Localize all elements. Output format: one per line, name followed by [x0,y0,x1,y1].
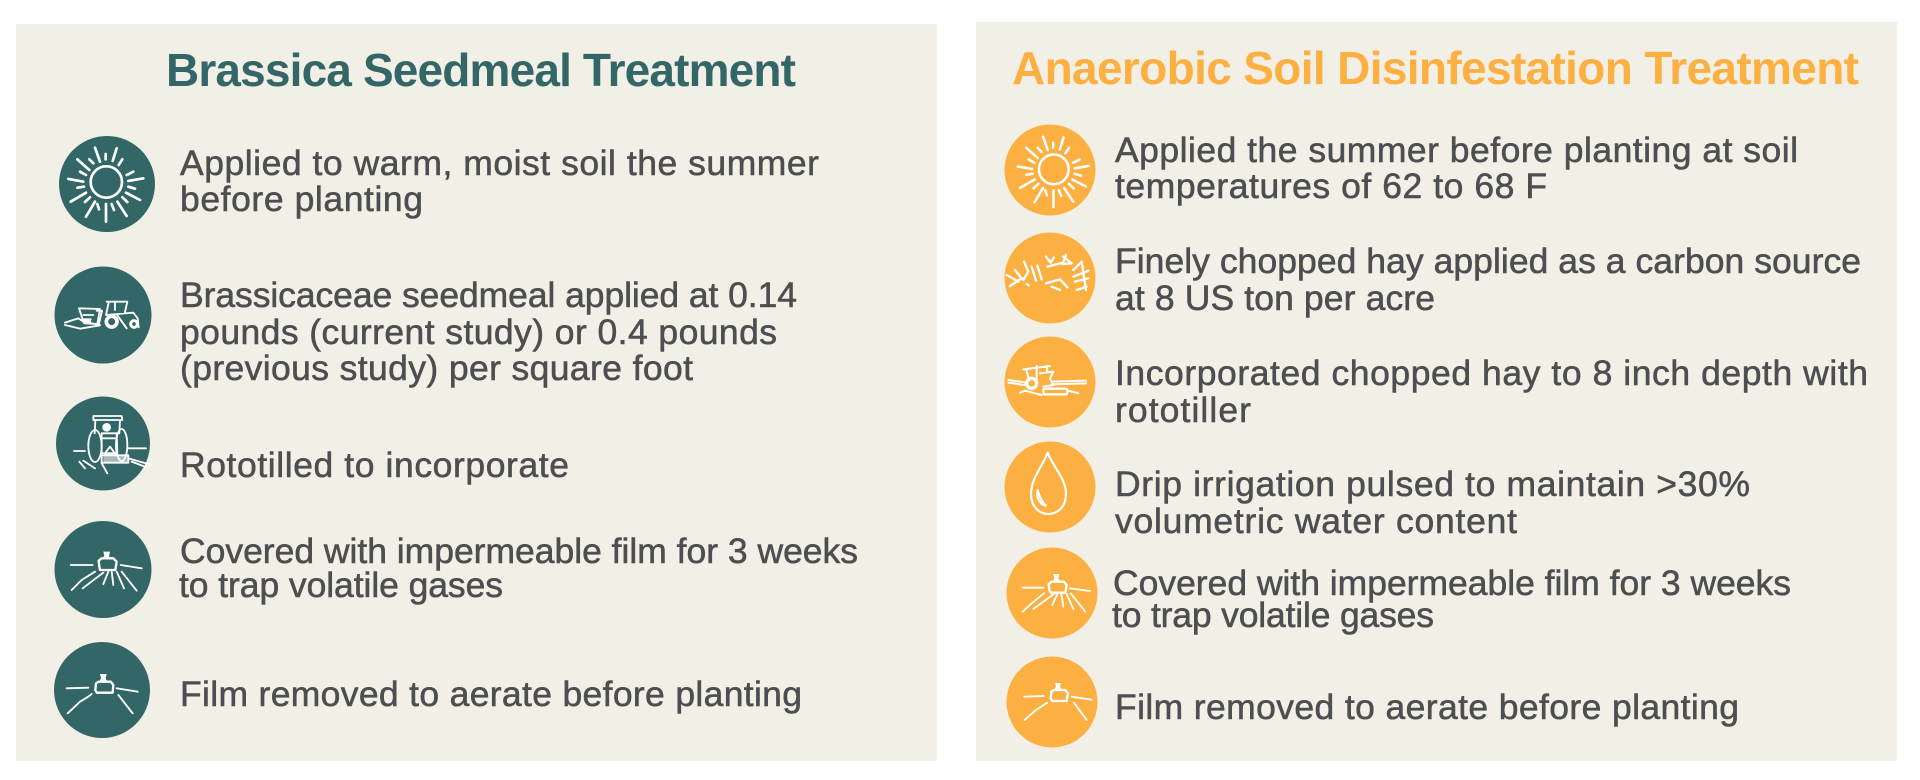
heading: Anaerobic Soil Disinfestation Treatment: Anaerobic Soil Disinfestation Treatment [1012,42,1859,94]
text: covered with film [179,531,858,605]
text: brassicaceae seedmeal rate [180,275,797,388]
text: brassicaceae seedmeal rate: Brassicaceae seedmeal applied at 0.14 [180,275,797,315]
text: drip irrigation: volumetric water content [1115,501,1517,541]
text: film removed: Film removed to aerate before planting [180,674,802,714]
text: rototilled: Rototilled to incorporate [180,445,569,485]
text: finely chopped hay: Finely chopped hay applied as a carbon source [1115,241,1861,281]
icon: film covering (orange) [1006,548,1098,638]
text: incorporated chopped hay: rototiller [1115,390,1251,430]
icon: water drop [1004,442,1096,532]
text: applied to warm moist soil [180,143,819,219]
heading: Brassica Seedmeal Treatment: Brassica Seedmeal Treatment [166,44,796,96]
text: covered with film [1112,563,1791,635]
icon: sun (teal) [59,136,155,232]
text: applied the summer: Applied the summer before planting at soil [1115,130,1798,170]
text: covered with film: to trap volatile gases [179,565,503,605]
text: finely chopped hay [1115,241,1861,318]
icon: chopped hay [1004,232,1096,324]
text: applied to warm moist soil: Applied to warm, moist soil the summer [180,143,819,183]
text: incorporated chopped hay: Incorporated chopped hay to 8 inch depth with [1115,353,1868,393]
icon: film removed (teal) [54,642,150,738]
text: brassicaceae seedmeal rate: (previous study) per square foot [180,348,693,388]
text: covered with film: to trap volatile gases [1112,595,1434,635]
text: covered with film: Covered with impermeable film for 3 weeks [1113,563,1791,603]
text: finely chopped hay: at 8 US ton per acre [1115,278,1435,318]
text: covered with film: Covered with impermeable film for 3 weeks [180,531,858,571]
text: brassicaceae seedmeal rate: pounds (current study) or 0.4 pounds [180,312,777,352]
text: drip irrigation [1115,464,1750,541]
icon: film removed (orange) [1006,656,1098,748]
text: applied to warm moist soil: before planting [180,179,423,219]
icon: tractor with tiller side view [1004,336,1096,428]
icon: sun (orange) [1004,124,1096,216]
text: applied the summer: temperatures of 62 to 68 F [1115,166,1547,206]
icon: rototiller tractor front view (teal) [56,396,152,490]
icon: film covering (teal) [54,521,152,618]
text: incorporated chopped hay [1115,353,1868,430]
text: drip irrigation: Drip irrigation pulsed to maintain >30% [1115,464,1750,504]
panel: Anaerobic Soil Disinfestation Treatment [976,22,1897,761]
panel: Brassica Seedmeal Treatment [16,24,937,761]
text: film removed: Film removed to aerate before planting [1115,687,1739,727]
text: applied the summer [1115,130,1798,206]
icon: tractor with spreader (teal) [54,266,152,364]
